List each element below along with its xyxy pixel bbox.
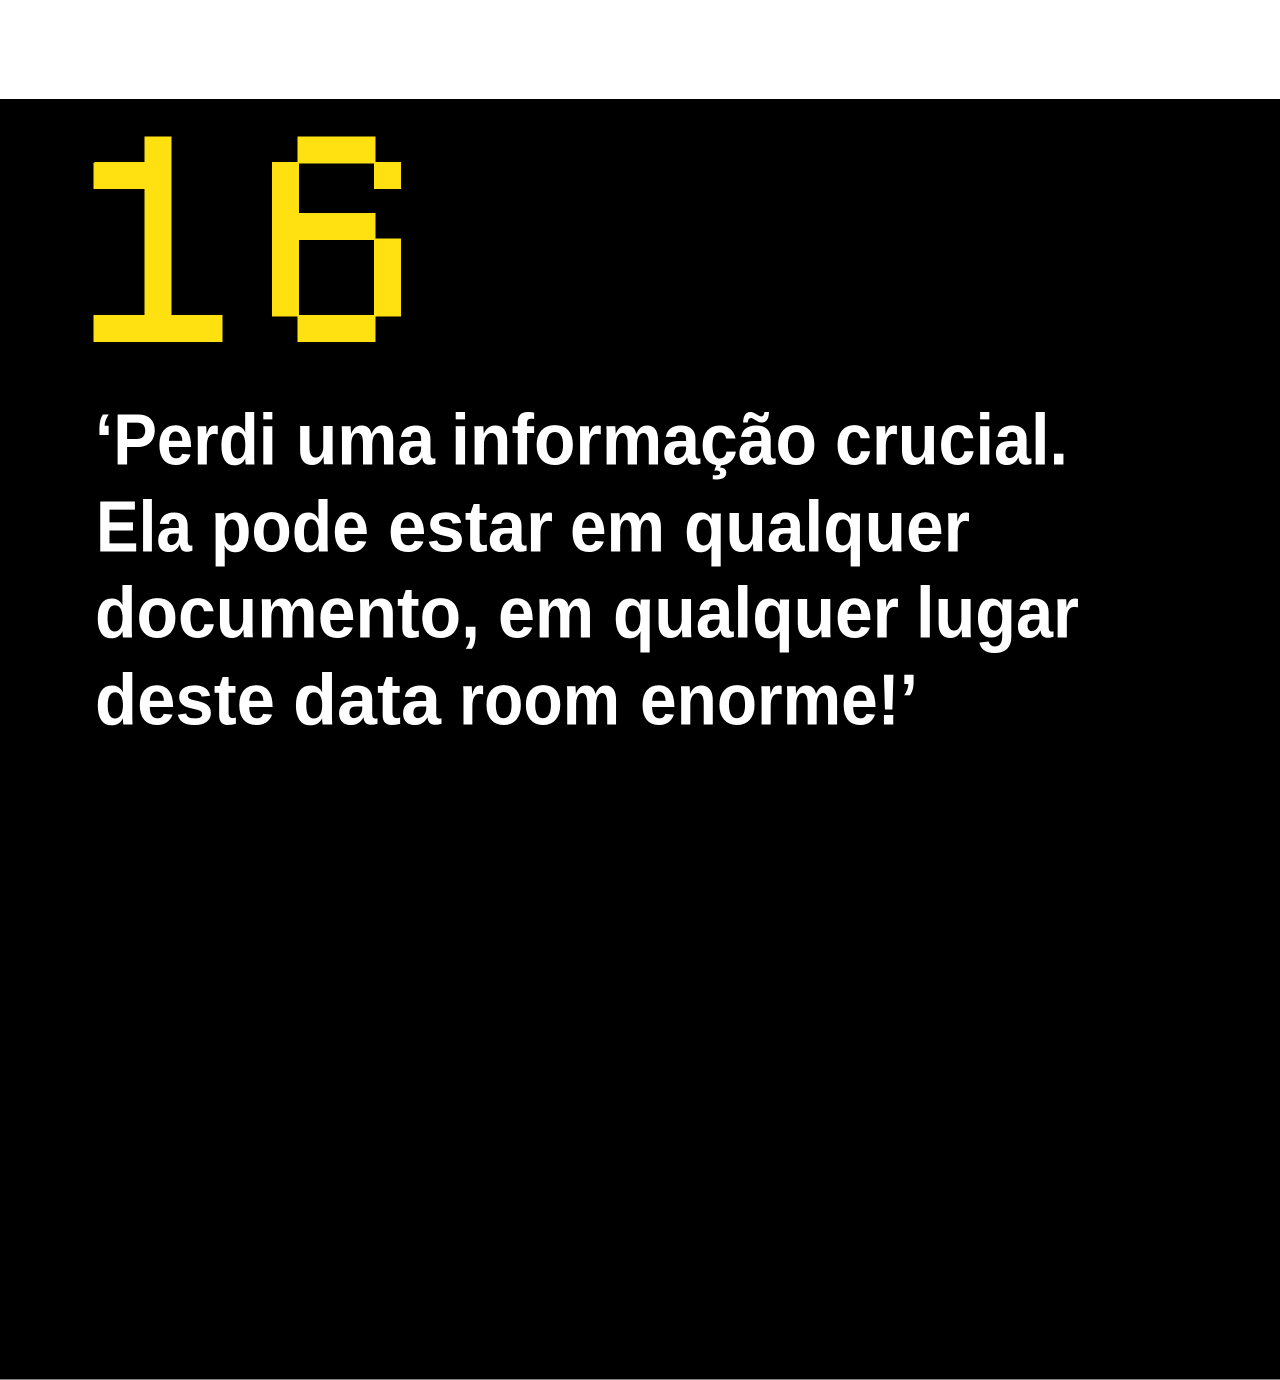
quote text: em xyxy=(498,574,594,654)
quote text: pode xyxy=(211,488,369,568)
quote text: room xyxy=(459,660,620,740)
quote text xyxy=(95,400,1079,740)
quote text: estar xyxy=(388,488,553,568)
quote text: data xyxy=(293,660,442,740)
quote text: lugar xyxy=(916,574,1079,654)
quote text: informação xyxy=(451,400,817,480)
number 16: 6 xyxy=(244,91,426,431)
quote text: deste xyxy=(95,660,275,740)
quote text: crucial. xyxy=(835,400,1068,480)
quote text: em xyxy=(570,488,665,568)
quote text: qualquer xyxy=(613,574,899,654)
quote text: qualquer xyxy=(684,488,970,568)
quote text: documento, xyxy=(95,574,480,654)
quote text: ‘Perdi xyxy=(95,400,277,480)
number 16 xyxy=(80,91,426,432)
quote text: Ela xyxy=(96,488,193,568)
number 16: 1 xyxy=(80,92,231,432)
quote text: uma xyxy=(296,400,436,480)
quote text: enorme!’ xyxy=(640,660,918,740)
